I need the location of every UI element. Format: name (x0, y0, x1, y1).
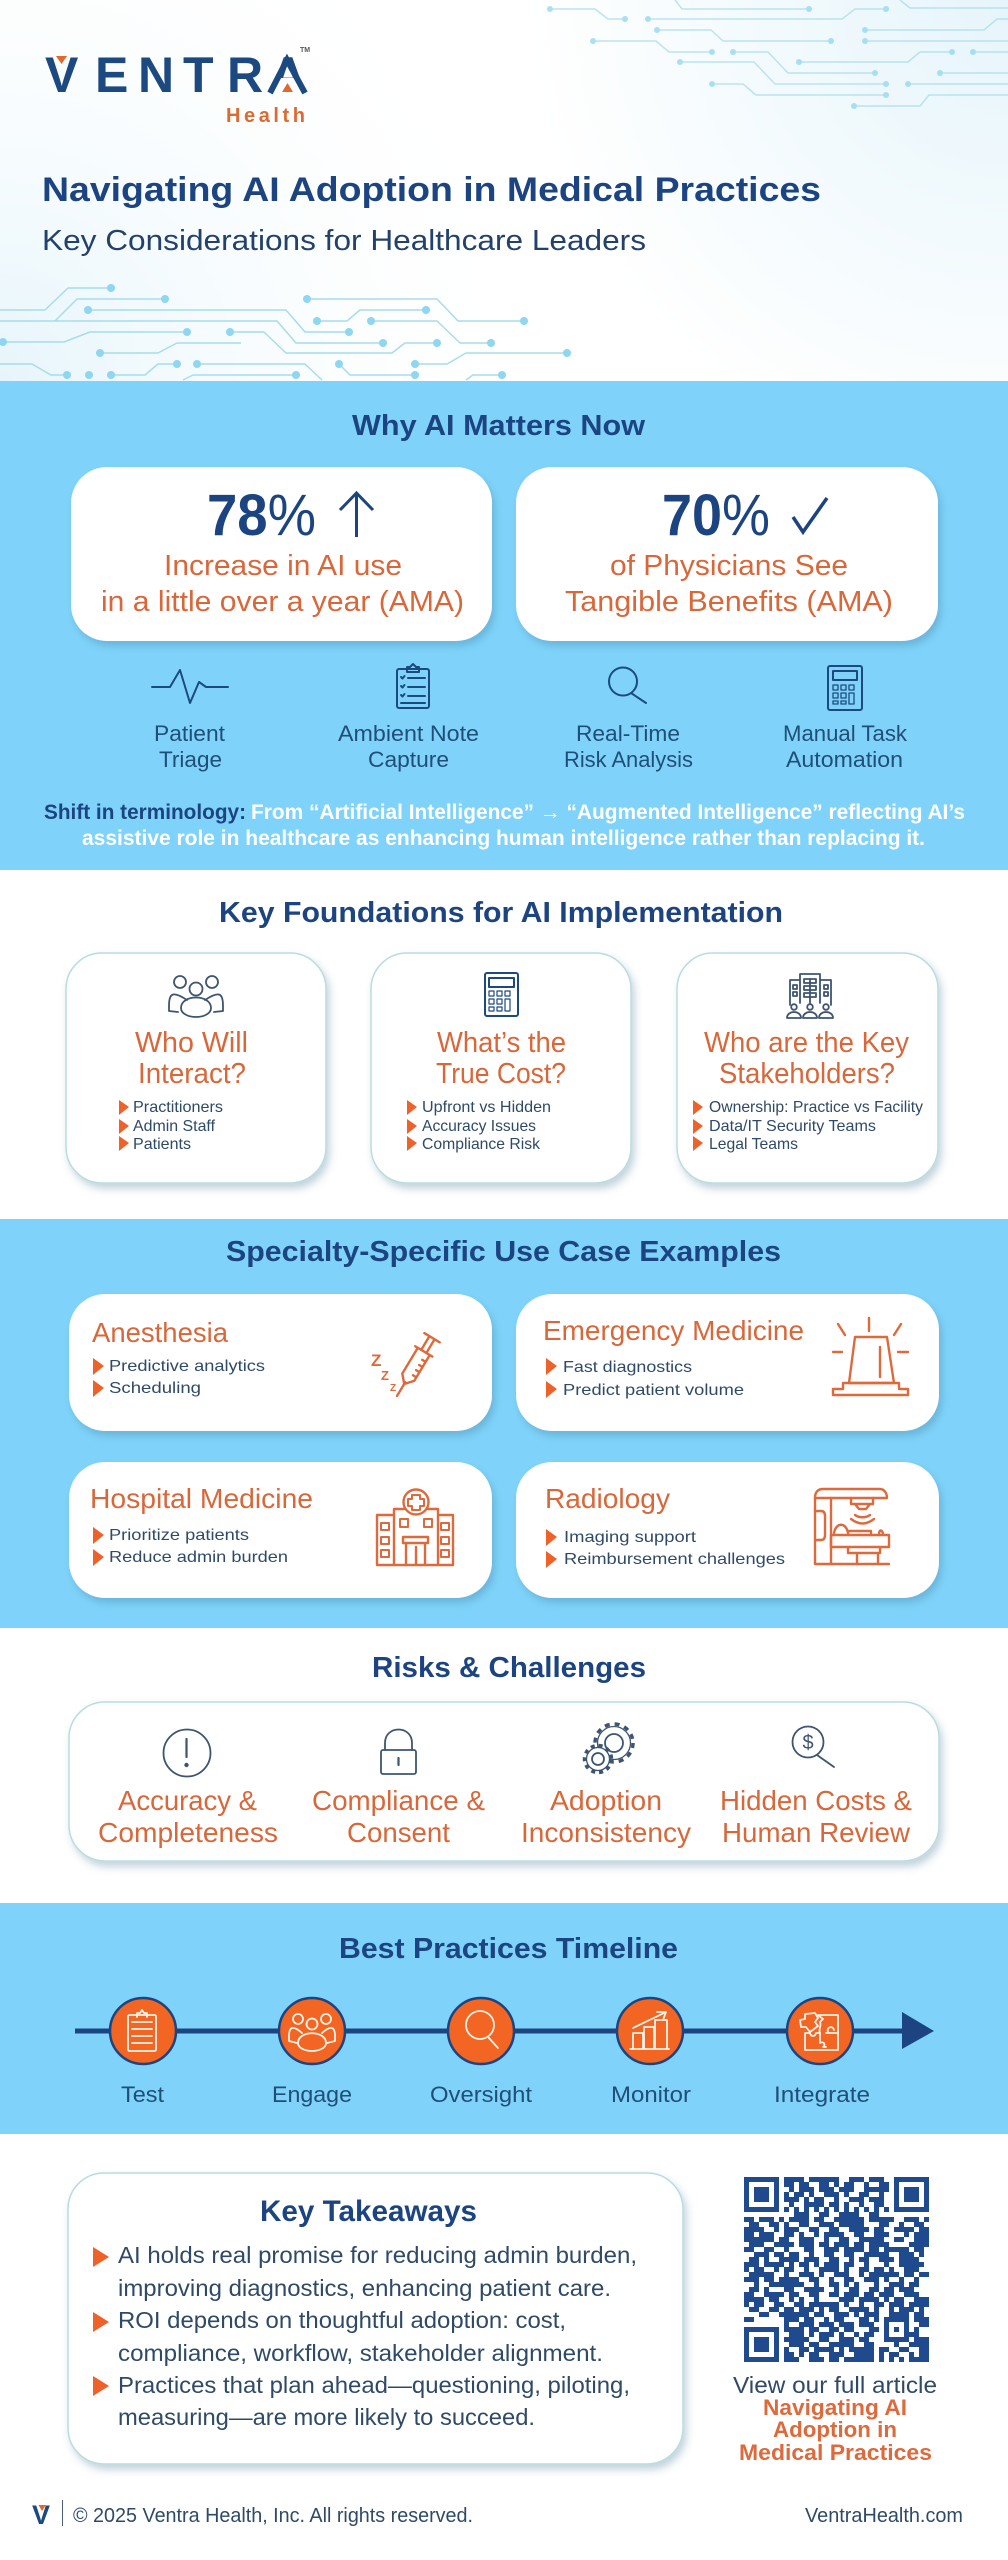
icon: lock (381, 1730, 416, 1774)
card: risks (69, 1702, 939, 1861)
takeaway 2: ROI depends on thoughtful adoption: cost, (118, 2307, 566, 2333)
card: risks: Accuracy & (118, 1785, 257, 1816)
card: who will interact: Patients (133, 1136, 191, 1153)
card: emergency medicine: Emergency Medicine (543, 1315, 804, 1346)
card: who will interact: Interact? (138, 1058, 246, 1090)
label: real-time risk analysis: Real-Time (576, 721, 680, 746)
step: engage: Engage (272, 2082, 352, 2107)
heading: Key Takeaways (260, 2195, 477, 2228)
card: stakeholders: Who are the Key (704, 1027, 909, 1059)
stat card: 70% (516, 467, 938, 641)
panel: why AI matters now (0, 381, 1008, 870)
circuit pattern: top right (547, 0, 1008, 109)
QR caption: View our full article (733, 2372, 937, 2398)
circuit pattern: bottom left (0, 284, 571, 380)
icon: buildings and people (787, 974, 833, 1018)
card: stakeholders: Ownership: Practice vs Facility (709, 1099, 923, 1116)
copyright: © 2025 Ventra Health, Inc. All rights reserved. (73, 2505, 473, 2527)
heading: Key Foundations for AI Implementation (219, 897, 783, 929)
stat card: 70%: 70% (662, 483, 770, 548)
card: emergency medicine: Fast diagnostics (563, 1359, 692, 1376)
step: oversight (430, 1998, 532, 2107)
card: stakeholders (677, 953, 938, 1183)
takeaway 1: AI holds real promise for reducing admin burden, (118, 2242, 637, 2268)
label: real-time risk analysis: Risk Analysis (564, 747, 693, 772)
card: who will interact: Admin Staff (133, 1118, 216, 1135)
icon: clipboard (397, 664, 429, 708)
website: VentraHealth.com (805, 2505, 963, 2527)
icon: dollar magnifier (792, 1726, 834, 1767)
takeaway 2: compliance, workflow, stakeholder alignment. (118, 2340, 603, 2366)
card: stakeholders: Stakeholders? (719, 1058, 895, 1090)
icon: people (169, 976, 223, 1017)
step: integrate (774, 1998, 870, 2107)
icon: syringe: Z (381, 1368, 389, 1383)
icon: dollar magnifier: $ (802, 1732, 814, 1754)
step: oversight: Oversight (430, 2082, 532, 2107)
card: risks: Adoption (550, 1785, 662, 1816)
card: risks: Compliance & (312, 1785, 485, 1816)
card: true cost: What’s the (437, 1027, 566, 1059)
card: hospital medicine: Reduce admin burden (109, 1549, 288, 1566)
takeaway 3: Practices that plan ahead—questioning, piloting, (118, 2372, 630, 2398)
heading: Best Practices Timeline (339, 1933, 678, 1965)
label: manual task automation (783, 721, 908, 772)
icon: calculator (828, 666, 862, 710)
QR code (744, 2177, 929, 2362)
step: engage (272, 1998, 352, 2107)
label: ambient note capture: Ambient Note (338, 721, 479, 746)
icon: syringe: Z (371, 1351, 381, 1370)
label: ambient note capture (338, 721, 479, 772)
label: manual task automation: Manual Task (783, 721, 908, 746)
card: anesthesia (69, 1294, 492, 1431)
card: hospital medicine (69, 1462, 492, 1598)
card: hospital medicine: Hospital Medicine (90, 1483, 313, 1514)
callout: shift in terminology: assistive role in healthcare as enhancing human intelligence rather than replacing it. (82, 827, 925, 850)
card: risks: Inconsistency (521, 1817, 691, 1848)
panel: key takeaways (68, 2173, 683, 2464)
card: who will interact: Practitioners (133, 1099, 223, 1116)
subtitle: Key Considerations for Healthcare Leaders (42, 225, 646, 257)
step: monitor (611, 1998, 691, 2107)
card: true cost: True Cost? (436, 1058, 566, 1090)
icon: calculator (485, 973, 518, 1016)
card: anesthesia: Predictive analytics (109, 1358, 265, 1375)
icon: pulse (152, 670, 228, 703)
card: risks: Hidden Costs & (720, 1785, 912, 1816)
card: anesthesia: Anesthesia (92, 1317, 228, 1348)
logo: Ventra Health: Health (226, 105, 305, 127)
label: real-time risk analysis (564, 721, 693, 772)
icon: hospital (377, 1490, 453, 1565)
card: hospital medicine: Prioritize patients (109, 1527, 249, 1544)
card: risks: Human Review (722, 1817, 911, 1848)
card: emergency medicine (516, 1294, 939, 1431)
card: risks: Completeness (98, 1817, 278, 1848)
step: monitor: Monitor (611, 2082, 691, 2107)
label: patient triage: Patient (154, 721, 225, 746)
arrow: timeline (75, 2012, 934, 2049)
QR caption: Adoption in (773, 2417, 897, 2442)
stat card: 78%: 78% (207, 483, 316, 548)
stat card: 70%: of Physicians See (610, 550, 848, 582)
panel: risks and challenges (69, 1652, 939, 1861)
logo: Ventra Health: VENTRA (45, 47, 306, 103)
logo: Ventra Health: TM (300, 47, 310, 54)
callout: shift in terminology: From “Artificial Intelligence” → “Augmented Intelligence” reflecting AI’s (251, 801, 965, 824)
icon: radiology scanner (815, 1489, 889, 1564)
card: true cost: Upfront vs Hidden (422, 1099, 551, 1116)
step: integrate: Integrate (774, 2082, 870, 2107)
header panel (0, 0, 1008, 381)
takeaway 1: improving diagnostics, enhancing patient care. (118, 2275, 611, 2301)
takeaway 3 (93, 2372, 630, 2430)
takeaway 2 (93, 2307, 603, 2366)
card: anesthesia: Scheduling (109, 1380, 201, 1397)
icon: magnifier (609, 668, 646, 703)
label: manual task automation: Automation (786, 747, 903, 772)
card: radiology: Imaging support (564, 1529, 697, 1546)
card: radiology (516, 1462, 939, 1598)
takeaway 3: measuring—are more likely to succeed. (118, 2404, 535, 2430)
logo: Ventra Health (45, 47, 310, 127)
step: test (110, 1998, 176, 2107)
card: stakeholders: Data/IT Security Teams (709, 1118, 876, 1135)
panel: specialty use cases (0, 1219, 1008, 1628)
footer (32, 2500, 963, 2530)
QR caption: Navigating AI (763, 2395, 907, 2420)
label: patient triage: Triage (159, 747, 222, 772)
stat card: 78%: in a little over a year (AMA) (101, 586, 464, 618)
stat card: 78%: Increase in AI use (164, 550, 402, 582)
card: stakeholders: Legal Teams (709, 1136, 798, 1153)
heading: Why AI Matters Now (352, 410, 645, 442)
heading: Specialty-Specific Use Case Examples (226, 1236, 781, 1268)
card: who will interact (66, 953, 326, 1183)
label: ambient note capture: Capture (368, 747, 449, 772)
footer logo mark: V (32, 2500, 50, 2530)
takeaway 1 (93, 2242, 637, 2301)
stat card: 70%: Tangible Benefits (AMA) (565, 586, 893, 618)
card: risks: Consent (347, 1817, 450, 1848)
QR caption: Medical Practices (739, 2440, 932, 2465)
card: emergency medicine: Predict patient volume (563, 1382, 744, 1399)
QR caption (733, 2372, 937, 2465)
icon: siren (833, 1318, 908, 1395)
panel: key foundations (66, 897, 938, 1183)
step: test: Test (121, 2082, 164, 2107)
icon: alert (164, 1730, 210, 1776)
heading: Risks & Challenges (372, 1652, 646, 1684)
callout: shift in terminology (44, 801, 965, 850)
card: true cost: Compliance Risk (422, 1136, 541, 1153)
panel: best practices timeline (0, 1903, 1008, 2134)
callout: shift in terminology: Shift in terminology: (44, 801, 246, 824)
card: who will interact: Who Will (135, 1027, 248, 1059)
card: true cost: Accuracy Issues (422, 1118, 536, 1135)
icon: gears (584, 1724, 633, 1772)
card: radiology: Radiology (545, 1483, 670, 1514)
card: radiology: Reimbursement challenges (564, 1551, 785, 1568)
stat card: 78% (71, 467, 492, 641)
title: Navigating AI Adoption in Medical Practices (42, 171, 821, 209)
card: true cost (371, 953, 631, 1183)
icon: syringe: Z (390, 1383, 396, 1394)
label: patient triage (154, 721, 225, 772)
icon: syringe (371, 1333, 441, 1401)
